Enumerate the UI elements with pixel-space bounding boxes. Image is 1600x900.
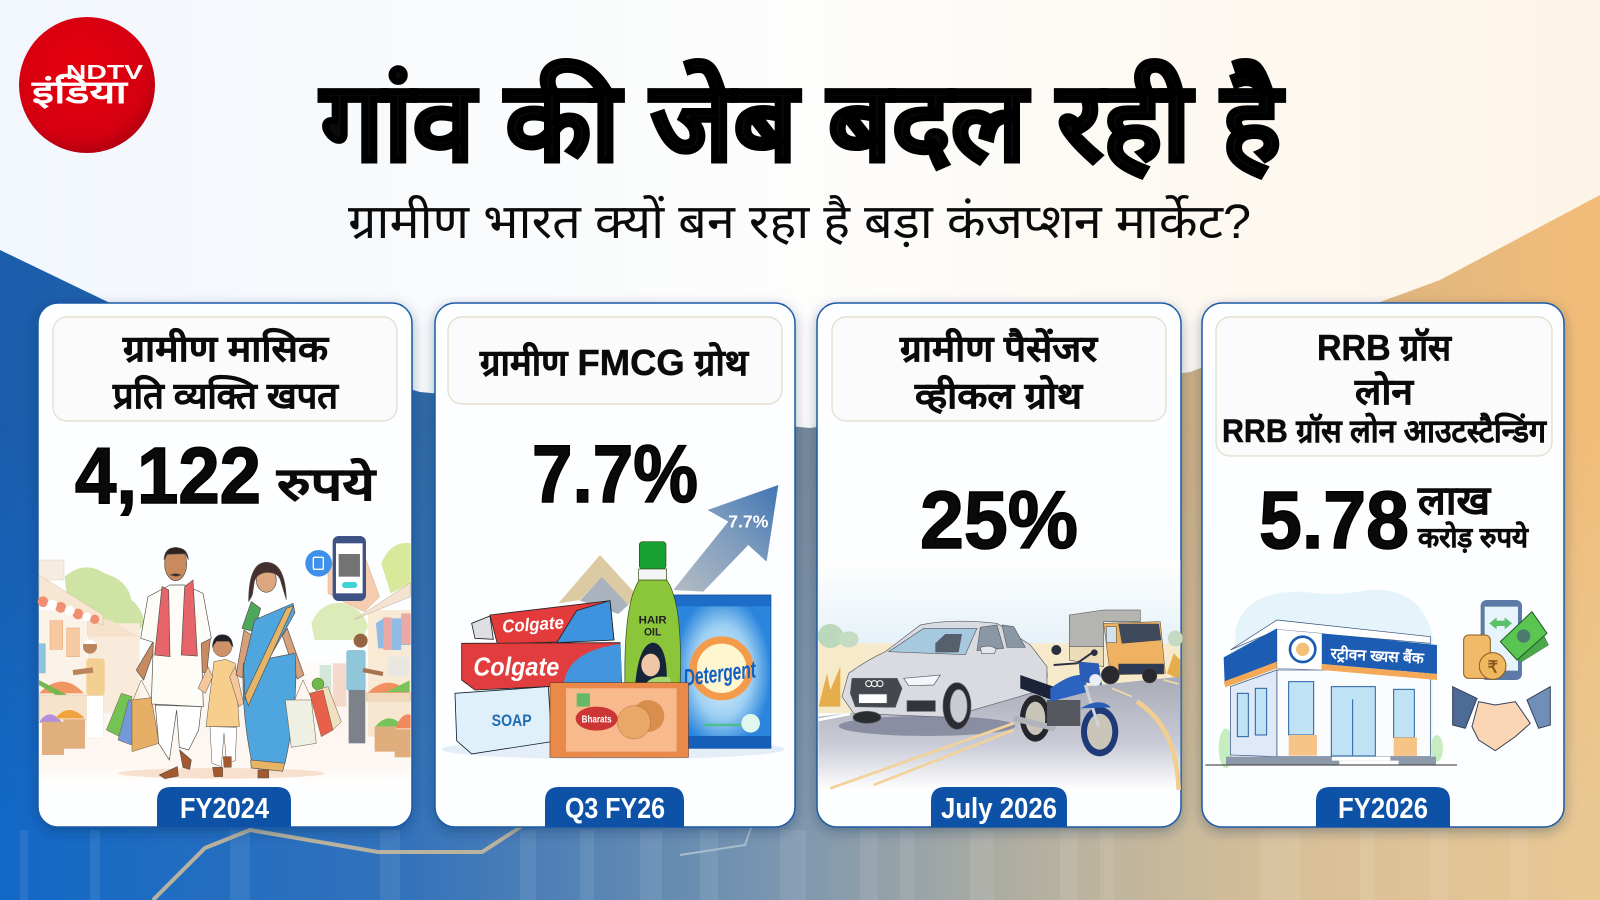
value: 5.78 lakh crore rupees: करोड़ रुपये bbox=[1417, 521, 1530, 553]
biscuit pack bbox=[550, 683, 688, 757]
card heading: RRB ग्रॉस लोन आउटस्टैन्डिंग bbox=[1222, 412, 1547, 449]
value: 4,122 rupees bbox=[75, 431, 378, 520]
card heading bbox=[53, 317, 397, 421]
card heading: ग्रामीण पैसेंजर bbox=[899, 328, 1098, 369]
illustration: FMCG products with growth arrow: OIL bbox=[644, 626, 661, 638]
card heading bbox=[448, 317, 782, 404]
subtitle: ग्रामीण भारत क्यों बन रहा है बड़ा कंजप्शन मार्केट? bbox=[348, 194, 1251, 249]
value: 5.78 lakh crore rupees: लाख bbox=[1417, 479, 1491, 523]
woman bbox=[236, 562, 304, 778]
illustration: rural family at market bbox=[38, 536, 411, 785]
toothpaste box: Colgate bbox=[473, 652, 559, 682]
period tag: FY2026: FY2026 bbox=[1338, 793, 1428, 825]
phone with QR code bbox=[305, 536, 380, 612]
panel: rural FMCG growth bbox=[435, 303, 795, 827]
period tag: July 2026: July 2026 bbox=[941, 793, 1057, 825]
hair oil bottle bbox=[625, 542, 681, 687]
right shopping bags bbox=[285, 678, 341, 747]
detergent pack bbox=[673, 595, 771, 748]
period tag: FY2026 bbox=[1316, 787, 1450, 827]
value: 4,122 rupees: रुपये bbox=[276, 458, 378, 510]
growth arrow: 7.7% bbox=[728, 511, 768, 531]
car bbox=[842, 621, 1047, 729]
toothpaste tube bbox=[472, 601, 614, 644]
illustration: car, truck and motorcycle on rural road bbox=[818, 560, 1183, 790]
period tag: Q3 FY26: Q3 FY26 bbox=[565, 793, 665, 825]
value: 5.78 lakh crore rupees bbox=[1259, 475, 1530, 566]
period tag: FY2024 bbox=[157, 787, 291, 827]
detergent pack: Detergent bbox=[682, 656, 758, 692]
soap box: SOAP bbox=[492, 711, 532, 730]
biscuit pack: Bharats bbox=[582, 715, 612, 726]
card heading: RRB ग्रॉस bbox=[1317, 327, 1453, 368]
man bbox=[136, 547, 211, 779]
card heading: लोन bbox=[1354, 371, 1415, 412]
value: 4,122 rupees: 4,122 bbox=[75, 431, 261, 520]
logo: NDTV India: इंडिया bbox=[31, 73, 129, 110]
period tag: FY2024: FY2024 bbox=[180, 793, 269, 825]
illustration: FMCG products with growth arrow: HAIR bbox=[639, 614, 667, 626]
logo: NDTV India bbox=[19, 17, 155, 153]
panel: RRB gross loan outstanding bbox=[1202, 303, 1564, 827]
shopper on right bbox=[346, 634, 383, 743]
soap box bbox=[455, 687, 552, 754]
left shopping bags bbox=[106, 680, 159, 752]
card heading: प्रति व्यक्ति खपत bbox=[112, 375, 339, 416]
card heading bbox=[832, 317, 1166, 421]
panel: rural passenger vehicle growth bbox=[817, 303, 1183, 827]
background shoppers bbox=[320, 663, 346, 707]
logo: NDTV India: .NDTV bbox=[58, 62, 144, 84]
phone, coins and cash bbox=[1464, 600, 1549, 680]
title: गांव की जेब बदल रही है bbox=[319, 59, 1285, 184]
illustration: FMCG products with growth arrow bbox=[442, 485, 785, 759]
value: 25%: 25% bbox=[920, 475, 1078, 566]
illustration: rural bank building, coins and handshake bbox=[1205, 590, 1550, 768]
truck bbox=[1069, 610, 1165, 684]
growth arrow bbox=[673, 485, 778, 592]
card heading: व्हीकल ग्रोथ bbox=[914, 375, 1084, 416]
phone, coins and cash: ₹ bbox=[1488, 657, 1499, 676]
toothpaste box bbox=[462, 643, 622, 690]
illustration: rural bank building, coins and handshake: रट्रीवन ख्यस बैंक bbox=[1329, 644, 1426, 668]
card heading: ग्रामीण मासिक bbox=[122, 328, 329, 369]
value: 7.7%: 7.7% bbox=[532, 429, 698, 520]
handshake bbox=[1453, 687, 1550, 751]
period tag: Q3 FY26 bbox=[545, 787, 684, 827]
child bbox=[198, 635, 244, 777]
seller bbox=[73, 639, 105, 738]
motorcycle bbox=[1014, 645, 1118, 756]
card heading: ग्रामीण FMCG ग्रोथ bbox=[479, 342, 750, 383]
panel: rural monthly per capita consumption bbox=[38, 303, 412, 827]
value: 5.78 lakh crore rupees: 5.78 bbox=[1259, 475, 1409, 566]
card heading bbox=[1216, 317, 1552, 456]
illustration: FMCG products with growth arrow: Colgate bbox=[502, 612, 564, 637]
